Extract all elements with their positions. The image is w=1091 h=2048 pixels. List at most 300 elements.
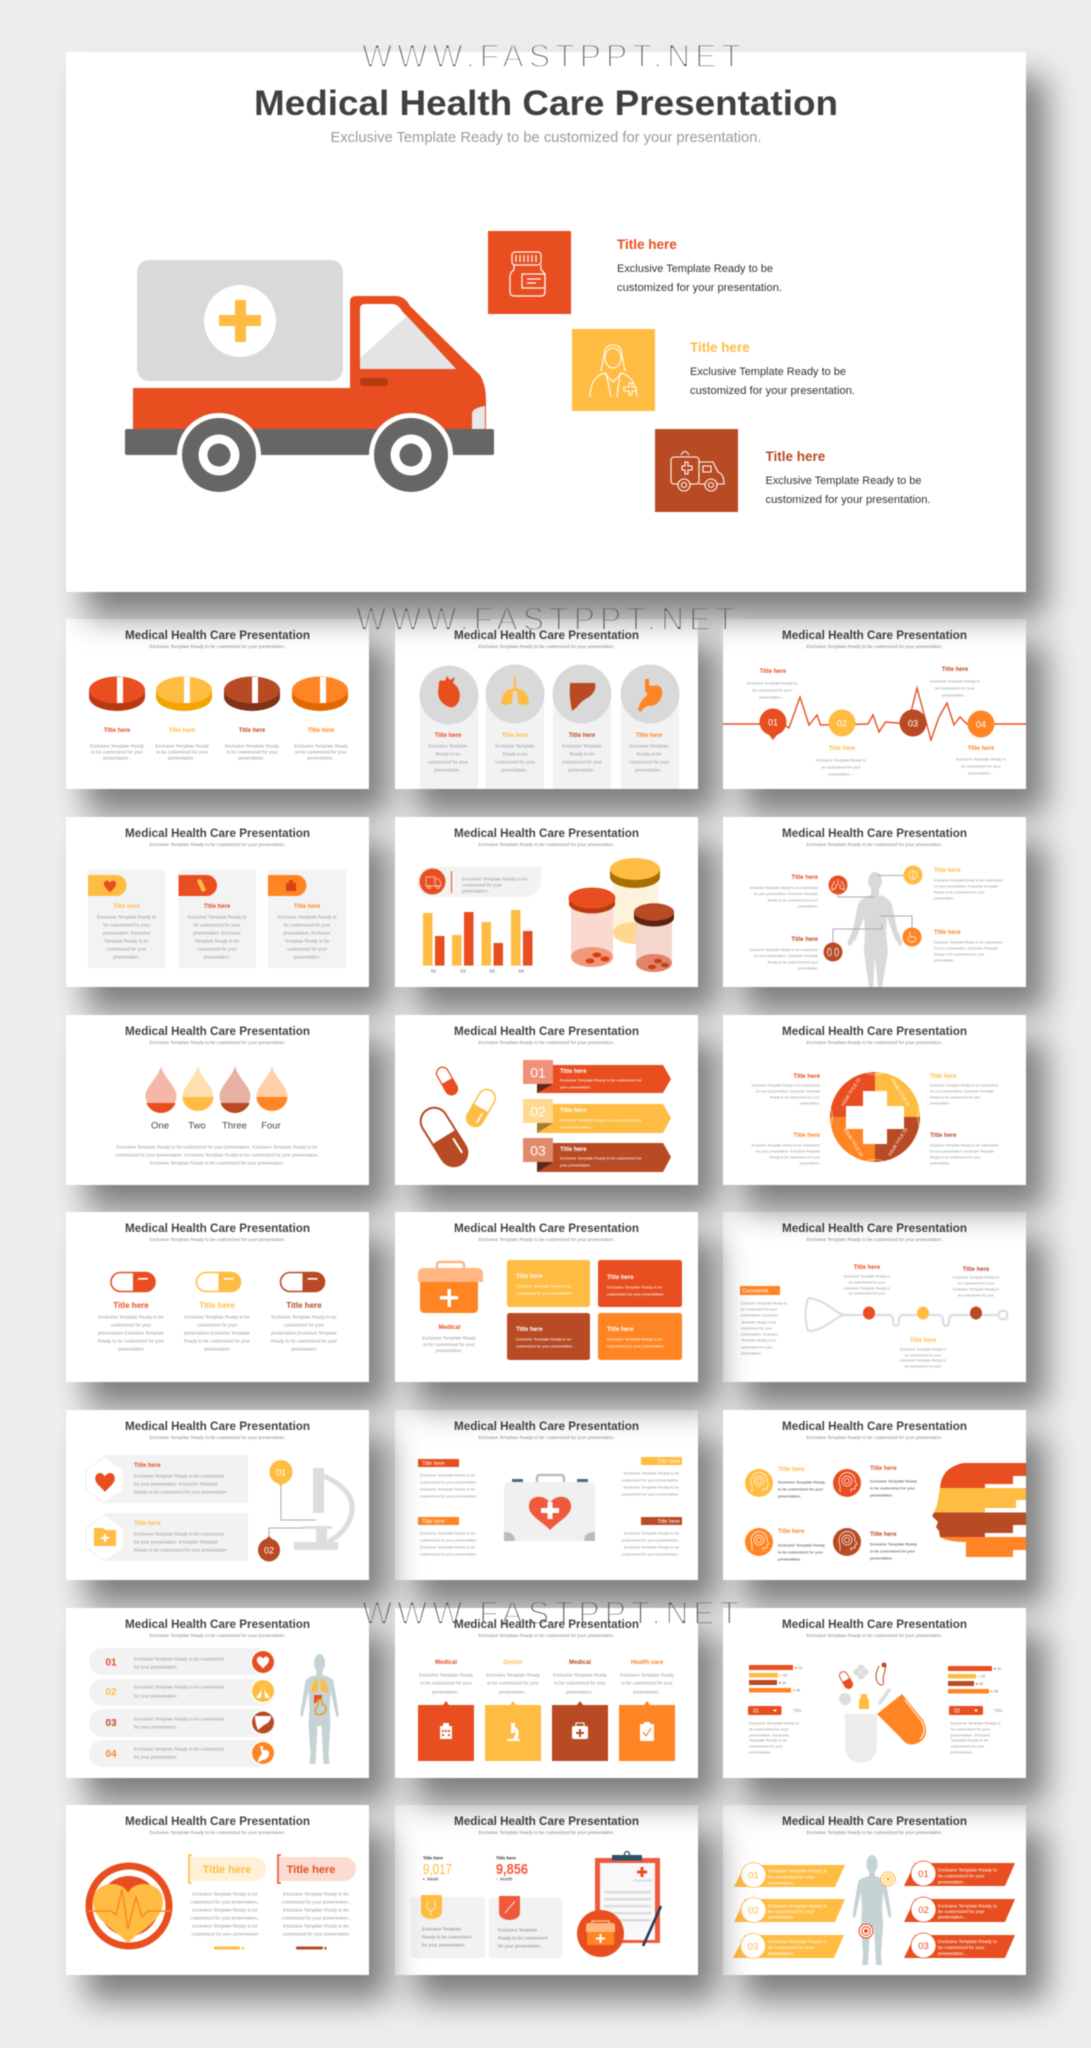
chart: ecg line (723, 688, 1026, 740)
text columns: presentation . (434, 768, 461, 772)
panel: body map slide (723, 817, 1026, 987)
text blocks: Exclusive Template Ready to (900, 1348, 946, 1352)
drop labels: Four (261, 1120, 281, 1131)
panel: cross cycle slide (723, 1014, 1026, 1184)
card 1 (410, 1895, 484, 1958)
text columns: Title here (635, 733, 662, 739)
text blocks: Exclusive Template Ready to (816, 758, 866, 762)
right banner 03: Exclusive Template Ready to (938, 1939, 997, 1944)
card 2: presentation. Exclusive (193, 930, 241, 936)
cycle diagram (830, 1072, 920, 1162)
mini bars right: 28 (994, 1690, 998, 1694)
heading (125, 1617, 310, 1638)
card 2: presentation. (204, 954, 230, 960)
heading (782, 1024, 967, 1044)
tag right bottom (621, 1517, 682, 1556)
cycle diagram: YOUR TITLE 03 (887, 1126, 909, 1157)
right banner 03: be customized for your (938, 1945, 985, 1950)
icon tile: doctor (572, 329, 655, 411)
item 1: Title here (778, 1467, 805, 1473)
comments box: Template Ready to be (741, 1338, 776, 1342)
text columns: Title here (308, 728, 335, 734)
row 04: 04 (105, 1749, 117, 1760)
row 04: Exclusive Template Ready to be customized (134, 1746, 224, 1752)
comments box: presentation. Exclusive (741, 1332, 778, 1336)
banner 03: Title here (560, 1146, 587, 1152)
right banner 01: be customized for your (938, 1874, 985, 1878)
stat 2: 9,856 (496, 1861, 528, 1878)
banner 03: 03 (530, 1142, 545, 1158)
card 2: Template Ready to be (195, 938, 240, 944)
text columns: presentation . (238, 756, 266, 760)
stat 1 (422, 1856, 452, 1882)
column 1: Ready to be customized for your (98, 1338, 165, 1344)
banner 01: 01 (530, 1064, 545, 1080)
illustration: ambulance truck (125, 260, 494, 497)
text blocks: Title here (793, 1074, 821, 1080)
heading: Medical Health Care Presentation (454, 628, 638, 642)
card 2 (488, 1896, 562, 1958)
callout: customized for your (462, 882, 502, 888)
text blocks: Exclusive Template Ready to (844, 1286, 890, 1290)
text blocks: presentation. (800, 1161, 820, 1165)
column 1: customized for your (111, 1322, 152, 1328)
left banner 03: presentation. (768, 1951, 795, 1956)
selector 01: be customized for your (749, 1726, 789, 1732)
left banner 01: be customized for your (768, 1874, 815, 1880)
text blocks: Title here (963, 1267, 990, 1273)
icon: medium capsule (462, 1086, 498, 1130)
heading (454, 826, 638, 847)
text blocks: Title here (942, 667, 969, 673)
card 1: Exclusive Template Ready to (97, 914, 156, 920)
card 2: be customized for your (194, 922, 241, 928)
card 2: Ready to be customized (498, 1936, 547, 1940)
text columns (90, 728, 349, 760)
heading (125, 1221, 310, 1242)
text blocks: Exclusive Template Ready to be customized (752, 1143, 820, 1147)
stat 1: Title here (422, 1856, 443, 1860)
left banner 03: 03 (748, 1942, 758, 1952)
selector 01: Title (793, 1708, 802, 1713)
column 2: presentation.Exclusive Template (184, 1330, 250, 1336)
icon: stethoscope line (806, 1298, 1008, 1331)
column 3: presentation (291, 1346, 317, 1352)
heading: Medical Health Care Presentation (782, 1419, 967, 1433)
tag left bottom: Title here (422, 1519, 444, 1525)
cycle diagram: YOUR TITLE 04 (842, 1127, 864, 1157)
card 2: Title here (204, 904, 231, 910)
text block: title 3: Title here (766, 449, 826, 464)
panel: mind head slide (723, 1410, 1026, 1580)
row 02: 02 (105, 1687, 117, 1698)
tile 1: Title here (516, 1274, 543, 1280)
column 1: Title here (113, 1301, 149, 1310)
connector wires (269, 1485, 316, 1537)
text blocks: Ready to be customized for your (934, 890, 985, 894)
tag left top: Title here (422, 1461, 444, 1467)
card 1: Ready to be customized (422, 1934, 471, 1940)
row 1: Ready to be customized for your presentation (134, 1490, 227, 1494)
card 3: customized for your (287, 946, 328, 952)
tag right bottom: customized for your presentation. (621, 1552, 678, 1556)
text blocks: presentation. (800, 1101, 820, 1105)
text block: title 3: Exclusive Template Ready to be (766, 475, 922, 487)
right banner 02: Exclusive Template Ready to (938, 1904, 997, 1908)
row 03: Exclusive Template Ready to be customized (134, 1716, 224, 1722)
heading: Medical Health Care Presentation (454, 1221, 638, 1235)
text block: title 1: customized for your presentation. (617, 282, 782, 294)
tag right top: Exclusive Template Ready to be (623, 1484, 678, 1490)
text block: title 1 (617, 237, 782, 294)
connectors (833, 876, 912, 943)
heading (454, 1221, 638, 1242)
left banner 02 (734, 1898, 845, 1922)
text blocks: Exclusive Template Ready to (900, 1358, 946, 1362)
tag left top (418, 1459, 477, 1498)
cycle diagram: YOUR TITLE 02 (889, 1077, 911, 1107)
selector 02: presentation. (950, 1750, 973, 1754)
item 1: Exclusive Template Ready (778, 1480, 825, 1484)
column: medical brown: to be customized for your (554, 1680, 606, 1686)
banner 02: Exclusive Template Ready to be customized for (560, 1117, 642, 1122)
text block: title 3: customized for your presentation. (766, 494, 930, 506)
text column 1: customized for your presentation (192, 1932, 259, 1936)
comments box: customized for your (741, 1346, 773, 1350)
heading: Exclusive Template Ready to be customized for your presentation. (150, 1830, 286, 1835)
selector 02: be customized for your (950, 1726, 991, 1732)
card 1: presentation. (113, 954, 140, 960)
column 2 (184, 1272, 251, 1352)
text columns: Title here (501, 733, 528, 739)
selector 02: Title (994, 1708, 1003, 1713)
column: medical brown: Exclusive Template Ready (553, 1672, 607, 1678)
banner 01 (522, 1060, 670, 1092)
bar chart: S2 (460, 968, 466, 974)
column: medical red: Medical (434, 1660, 457, 1666)
drop labels: One (151, 1120, 169, 1131)
callout: presentation… (462, 888, 491, 894)
text blocks: presentation… (759, 694, 785, 700)
text blocks: presentation. (934, 958, 954, 962)
right banner 02: presentation... (938, 1914, 967, 1920)
item 4: Title here (870, 1532, 897, 1538)
item 4: Exclusive Template Ready (870, 1542, 917, 1546)
card 1: Template Ready to be (104, 938, 149, 944)
tag right bottom: Exclusive Template Ready to be (623, 1544, 678, 1550)
item 3: presentation. (778, 1556, 801, 1562)
text columns (427, 733, 669, 772)
card 1: for your presentation. (422, 1942, 465, 1948)
banner 01: Title here (560, 1068, 587, 1074)
bar chart: S1 (430, 968, 436, 974)
text columns: Exclusive Template (495, 744, 535, 748)
column: medical red (418, 1660, 474, 1761)
row 1: Exclusive Template Ready to be customized (134, 1474, 224, 1478)
text blocks: for your presentation. Exclusive Template (756, 1149, 820, 1153)
tab 1 (189, 1855, 266, 1883)
tag left top: customized for your presentation. (420, 1480, 477, 1484)
heading: Exclusive Template Ready to be customized for your presentation. (150, 1633, 286, 1638)
tile 4: Exclusive Template Ready to be (606, 1336, 662, 1342)
column: doctor: presentation.. (499, 1690, 526, 1694)
column: health care (618, 1660, 674, 1761)
text blocks: presentation. (798, 966, 818, 970)
tile 1 (506, 1260, 590, 1307)
text blocks: Title here (791, 937, 819, 943)
comments box: customized for your (741, 1326, 773, 1330)
banner 03 (522, 1138, 670, 1172)
cycle diagram: YOUR TITLE 01 (840, 1076, 862, 1107)
heading (454, 1617, 638, 1638)
kit caption: presentation. (435, 1348, 462, 1353)
text columns: Ready to be (435, 752, 460, 756)
text column 1: Exclusive Template Ready to be (192, 1908, 258, 1912)
tag left bottom: customized for your presentation. (420, 1538, 477, 1542)
row 01: Exclusive Template Ready to be customized (134, 1656, 224, 1662)
left banner 03: Exclusive Template Ready to (768, 1939, 827, 1944)
column: medical red: to be customized for your (420, 1680, 472, 1686)
left banner 01: Exclusive Template Ready to (768, 1868, 827, 1874)
row 04: for your presentation. (134, 1754, 177, 1760)
right banner 03: 03 (918, 1941, 929, 1952)
heading (782, 1419, 967, 1440)
selector 01: presentation. (749, 1750, 772, 1754)
tile 2: customized for your presentation (606, 1292, 663, 1296)
tab 1: Title here (203, 1864, 251, 1876)
text column 1: customized for your presentation.. (190, 1916, 260, 1920)
right banner 01 (904, 1861, 1015, 1886)
panel: tablets slide (66, 619, 369, 789)
tile 2: Exclusive Template Ready to be (606, 1284, 662, 1290)
selector 01: Template Ready to be (749, 1738, 787, 1742)
card 2: customized for your (197, 946, 238, 952)
item 3: Title here (778, 1529, 805, 1535)
item 1 (745, 1467, 825, 1498)
column 1: presentation.Exclusive Template (98, 1330, 164, 1336)
text block: Exclusive Template Ready to be customized for your presentation. (150, 1160, 284, 1165)
left banner 01: 01 (748, 1870, 759, 1882)
text block: Exclusive Template Ready to be customized for your presentation. Exclusive Template Ready to be (116, 1144, 318, 1149)
watermarks: WWW.FASTPPT.NET (356, 601, 735, 637)
stat 2: Month (500, 1876, 513, 1882)
row 2: Title here (134, 1521, 161, 1527)
text blocks: presentation. (934, 896, 954, 900)
watermarks: WWW.FASTPPT.NET (362, 1595, 739, 1631)
tile 3: customized for your presentation (516, 1344, 572, 1348)
card 2 (178, 870, 256, 968)
item 4: to be customized for your (870, 1548, 916, 1554)
tile 3 (506, 1313, 590, 1360)
heading (454, 1814, 638, 1835)
item 2 (833, 1466, 917, 1498)
mini bars right: 10 (997, 1667, 1001, 1671)
icon: drop four (256, 1066, 288, 1110)
text block: title 2: customized for your presentation. (690, 385, 855, 397)
mini bars left: 19 (783, 1674, 787, 1678)
illustration: open capsule (845, 1694, 926, 1763)
illustration: yellow jar (610, 858, 660, 944)
text column 2: customized for your presentation (283, 1932, 350, 1936)
left banner 02: 02 (748, 1906, 759, 1916)
text blocks: Title here (968, 746, 995, 752)
selector 02: Template Ready to be (950, 1738, 988, 1742)
text blocks: be customized for your (752, 688, 792, 692)
text blocks: presentation. (798, 904, 818, 908)
row 02: for your presentation. (134, 1694, 177, 1698)
panel: medical case slide (394, 1410, 698, 1580)
text blocks: for your presentation. Exclusive Template (754, 954, 818, 958)
card 1: presentation. Exclusive (103, 930, 151, 936)
column 2: Title here (199, 1301, 235, 1310)
left banner 03 (733, 1934, 844, 1958)
text blocks: Exclusive Template Ready to (844, 1274, 890, 1278)
text block: title 3 (766, 449, 930, 506)
row 2: Ready to be customized for your presentation (134, 1548, 227, 1552)
heading: Medical Health Care Presentation (454, 1419, 638, 1433)
left banner 02: presentation. (768, 1914, 795, 1920)
subtitle: Exclusive Template Ready to be customized for your presentation. (330, 130, 762, 146)
text column 2: Exclusive Template Ready to be (283, 1892, 349, 1896)
text blocks: Title here (934, 868, 961, 874)
heading: Exclusive Template Ready to be customized for your presentation. (806, 1633, 942, 1638)
selector 02: Exclusive Template Ready to (950, 1720, 1000, 1726)
text blocks: presentation. (930, 1101, 950, 1105)
text columns: Title here (104, 728, 131, 734)
column: health care: presentation.. (633, 1690, 660, 1694)
heading: Medical Health Care Presentation (782, 1617, 967, 1631)
text column 2: customized for your presentation.. (281, 1900, 351, 1904)
text columns: presentation . (568, 768, 595, 772)
text column 1 (190, 1892, 260, 1950)
text columns: customized for your (494, 760, 535, 764)
tile 4 (598, 1313, 682, 1360)
heading: Exclusive Template Ready to be customized for your presentation. (806, 644, 942, 649)
heading: Exclusive Template Ready to be customized for your presentation. (478, 1633, 614, 1638)
text columns: presentation . (307, 756, 335, 760)
text columns: to be customized for your (91, 750, 143, 754)
item 1: presentation. (778, 1494, 801, 1498)
card 2: Exclusive Template (498, 1928, 537, 1932)
banner 02: 02 (530, 1103, 545, 1119)
text block: title 2: Exclusive Template Ready to be (690, 366, 846, 378)
heading: Medical Health Care Presentation (125, 1221, 310, 1235)
text blocks: Title here (930, 1074, 957, 1080)
text columns: Title here (568, 733, 595, 739)
text blocks: for your presentation. Exclusive Template (756, 1089, 820, 1093)
stat 1: 9,017 (422, 1861, 452, 1878)
selector 02 (949, 1706, 1003, 1754)
heading: Exclusive Template Ready to be customized for your presentation. (806, 1237, 942, 1242)
timeline dots (863, 1306, 982, 1320)
row 1: for your presentation. Exclusive Template (134, 1482, 218, 1486)
text blocks: for your presentation. Exclusive Template (754, 892, 818, 896)
icon tile: medicine bottle (488, 231, 571, 314)
heading: Exclusive Template Ready to be customized for your presentation. (150, 1435, 286, 1440)
text blocks: for your presentation. Exclusive Template (934, 884, 998, 888)
column: health care: to be customized for your (621, 1680, 673, 1686)
icon: heart (438, 676, 459, 707)
mini bars right (948, 1666, 1001, 1694)
tag right top: Exclusive Template Ready to be (623, 1470, 678, 1476)
banner 02: Title here (560, 1108, 587, 1114)
panel: body targets slide (723, 1805, 1026, 1975)
text blocks: Exclusive Template Ready to be customized (930, 1143, 998, 1147)
row 02 (89, 1678, 276, 1706)
text blocks: be customized for your (958, 1294, 995, 1298)
tile 4: Title here (606, 1327, 634, 1333)
illustration: microscope (294, 1468, 352, 1550)
illustration: body with organs (300, 1654, 339, 1764)
column 2: presentation (204, 1346, 230, 1352)
card 1: Exclusive Template (422, 1926, 461, 1932)
selector 01: customized for your (749, 1744, 784, 1748)
panel: first aid kit grid slide (394, 1212, 698, 1382)
text columns: Title here (239, 728, 266, 734)
heading: Medical Health Care Presentation (782, 628, 967, 642)
heading: Medical Health Care Presentation (454, 1617, 638, 1631)
item 2: presentation. (870, 1492, 893, 1498)
mini bars left: 28 (796, 1688, 800, 1692)
column 3: customized for your (284, 1322, 325, 1328)
text columns: to be customized for your (226, 750, 278, 754)
icon: tablets row (89, 676, 348, 711)
illustration: human body (848, 872, 902, 987)
organ markers (824, 866, 922, 962)
row 03: 03 (105, 1718, 117, 1729)
column 3: Exclusive Template Ready to be (271, 1314, 337, 1320)
text column 1: Exclusive Template Ready to be (192, 1924, 258, 1928)
panel: numbered organs slide (66, 1608, 369, 1778)
heading: Exclusive Template Ready to be customized for your presentation. (478, 644, 614, 649)
heading: Medical Health Care Presentation (454, 1814, 638, 1828)
heading: Exclusive Template Ready to be customized for your presentation. (478, 842, 614, 847)
row 01: for your presentation. (134, 1664, 177, 1670)
icon: large capsule (414, 1102, 473, 1172)
column 2: Ready to be customized for your (184, 1338, 251, 1344)
left banner 01 (734, 1862, 845, 1888)
text blocks: Title here (829, 746, 856, 752)
mini bars right: 16 (979, 1682, 983, 1686)
heading: Exclusive Template Ready to be customized for your presentation. (478, 1040, 614, 1044)
left banner 02: Exclusive Template Ready to (768, 1904, 827, 1908)
callout: Exclusive Template Ready to be (462, 876, 527, 882)
heading: Medical Health Care Presentation (125, 1419, 310, 1433)
heading (454, 628, 638, 649)
emblem: heart in ring (86, 1862, 172, 1950)
text blocks: Ready to be customized for your (768, 960, 819, 964)
heading (782, 826, 967, 847)
text blocks: Exclusive Template Ready to (930, 678, 980, 684)
stat 1: Week (426, 1876, 439, 1882)
text blocks: Title here (930, 1132, 957, 1138)
column 1: Exclusive Template Ready to be (98, 1314, 164, 1320)
icon: liver (569, 683, 595, 711)
text columns: Title here (169, 728, 196, 734)
text blocks: be customized for your (821, 764, 861, 770)
text blocks: presentation… (942, 692, 968, 698)
tag right top: Title here (657, 1459, 680, 1465)
card 1: Title here (113, 904, 140, 910)
stat 2 (496, 1856, 528, 1882)
selector 01: Exclusive Template Ready to (749, 1720, 799, 1726)
comments box (740, 1286, 787, 1356)
text columns: Exclusive Template (629, 744, 669, 748)
marker pins: 01 (276, 1468, 286, 1478)
bar chart (418, 910, 536, 974)
text columns: to be customized for your (156, 750, 208, 754)
text columns: Exclusive Template Ready (90, 744, 145, 748)
